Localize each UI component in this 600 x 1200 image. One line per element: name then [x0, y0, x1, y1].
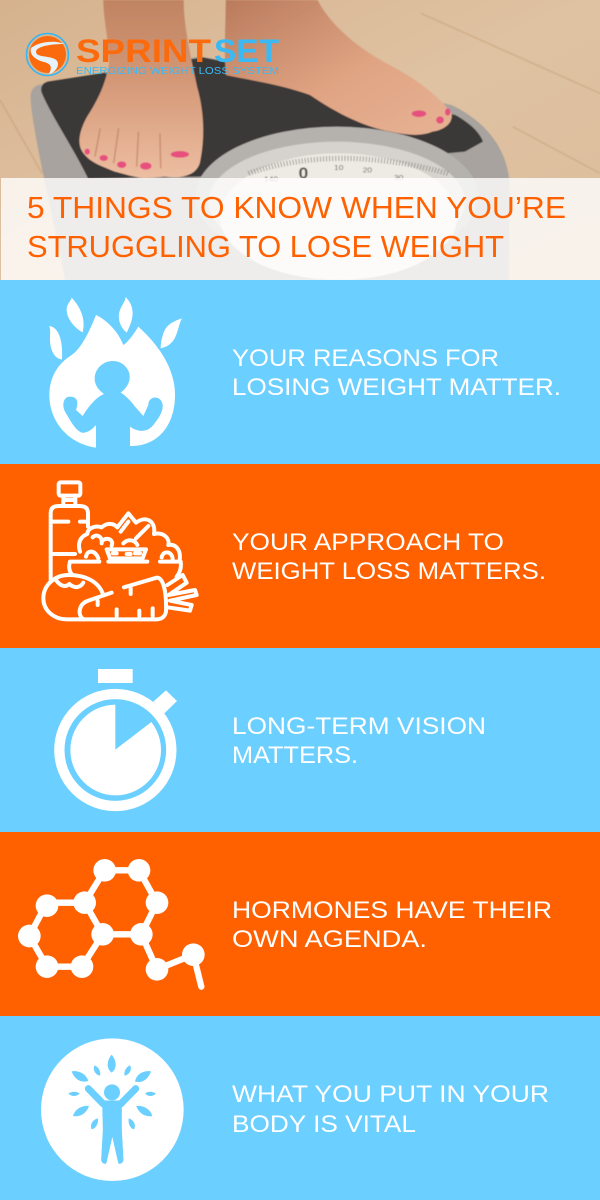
label: vision: [232, 713, 486, 769]
label: approach: [232, 529, 546, 585]
toe lines: [95, 128, 161, 168]
dial housing: [195, 127, 478, 267]
icon: person with leaves in a circle: [41, 1038, 184, 1181]
logo: Sprint Set: [26, 33, 279, 77]
title text: 5 THINGS TO KNOW WHEN YOU’RE: [27, 190, 566, 225]
toenails: [85, 108, 450, 170]
icon: hormone molecule: [18, 859, 205, 987]
panel: what you put in your body: [0, 1016, 600, 1200]
icon: flame with strong person: [49, 297, 182, 448]
label: hormones: OWN AGENDA.: [232, 926, 427, 953]
header photo: feet on a bathroom scale: 20: [363, 166, 373, 175]
header photo: feet on a bathroom scale: 30: [394, 173, 404, 182]
title text: [27, 190, 566, 264]
label: body: WHAT YOU PUT IN YOUR: [232, 1081, 549, 1108]
label: approach: WEIGHT LOSS MATTERS.: [232, 558, 546, 585]
label: reasons: YOUR REASONS FOR: [232, 345, 499, 372]
label: vision: MATTERS.: [232, 742, 358, 769]
label: hormones: HORMONES HAVE THEIR: [232, 897, 552, 924]
scale mat: [41, 57, 483, 178]
label: vision: LONG-TERM VISION: [232, 713, 486, 740]
scale body: [30, 57, 510, 280]
label: reasons: [232, 345, 561, 401]
label: body: [232, 1081, 549, 1138]
header photo: feet on a bathroom scale: 0: [298, 165, 308, 182]
dial ticks and numbers: [249, 158, 448, 173]
left leg and foot: [79, 0, 203, 178]
panel: approach: [0, 464, 600, 648]
panel: reasons: [0, 280, 600, 464]
logo: Sprint Set: SET: [214, 33, 279, 69]
label: body: BODY IS VITAL: [232, 1111, 416, 1138]
label: reasons: LOSING WEIGHT MATTER.: [232, 374, 561, 401]
panel: long-term vision: [0, 648, 600, 832]
icon: bottle, salad bowl and vegetables: [43, 482, 197, 619]
title band: [1, 178, 600, 280]
logo wordmark: SPRINT: [76, 33, 212, 69]
logo mark: [26, 34, 68, 76]
title text: STRUGGLING TO LOSE WEIGHT: [27, 229, 504, 264]
label: hormones: [232, 897, 552, 953]
panel: hormones: [0, 832, 600, 1016]
logo tagline: ENERGIZING WEIGHT LOSS SYSTEM: [76, 66, 279, 77]
header photo: feet on a bathroom scale: [0, 0, 600, 280]
icon: stopwatch: [59, 669, 177, 806]
right leg and foot: [225, 0, 452, 135]
floor tile seams: [0, 13, 600, 173]
label: approach: YOUR APPROACH TO: [232, 529, 504, 556]
header photo: feet on a bathroom scale: 10: [334, 163, 344, 172]
header photo: feet on a bathroom scale: 140: [264, 175, 279, 184]
